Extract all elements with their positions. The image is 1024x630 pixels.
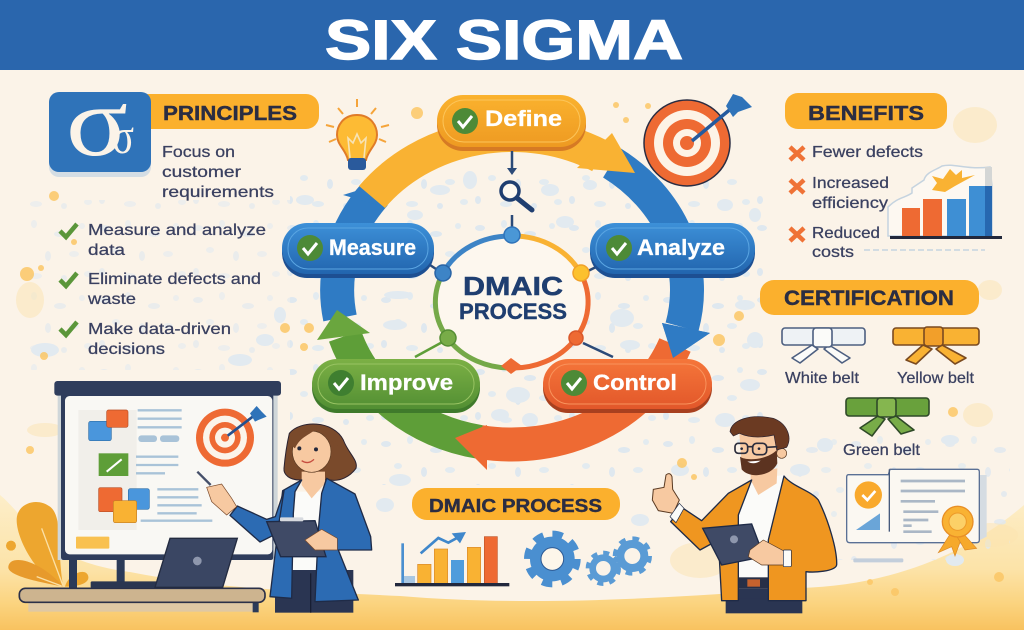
arc: improve arrow green <box>317 310 480 442</box>
background splatter <box>31 171 964 566</box>
center circle: DMAIC process: DMAIC <box>463 271 563 301</box>
analyze arrow head overlay <box>662 323 710 358</box>
hair <box>730 417 789 450</box>
panel: benefits <box>785 93 1002 261</box>
principles heading pill <box>130 94 319 129</box>
list: principle items: decisions <box>88 341 165 358</box>
list: principle items <box>60 222 266 358</box>
clipboard tablet <box>267 521 326 557</box>
chart: DMAIC cycle ring <box>282 95 755 470</box>
bottom heading pill: DMAIC PROCESS <box>429 496 602 516</box>
figure: woman presenter <box>197 424 372 613</box>
step pill: Define: Define <box>485 106 562 131</box>
pointing hand and pointer <box>197 472 211 485</box>
arc: define arrow yellow <box>372 133 635 197</box>
icon: sigma tile: σ <box>112 108 134 164</box>
illustration: presentation board and presenter <box>6 381 372 613</box>
list: benefits items: Increased <box>812 175 889 192</box>
list: benefits items: Reduced <box>812 225 880 242</box>
list: benefits items: Fewer defects <box>812 144 923 161</box>
icon: small gears <box>588 539 650 584</box>
icon: green belt <box>843 398 929 459</box>
icon: yellow belt <box>893 327 979 387</box>
chart: bars with trend arrow <box>395 532 509 586</box>
bottom heading pill <box>412 488 620 520</box>
presentation board <box>54 381 281 590</box>
background yellow dots <box>20 102 1004 596</box>
list: principle items: Make data-driven <box>88 321 231 338</box>
glasses <box>735 443 777 455</box>
white shirt <box>292 492 322 570</box>
blazer right <box>768 476 837 601</box>
beard <box>740 450 777 475</box>
icon: orange plant <box>6 502 88 587</box>
step pill: Define <box>437 95 586 151</box>
list: benefits items: costs <box>812 244 854 261</box>
step pill: Control <box>543 359 712 413</box>
tablet <box>703 524 764 565</box>
pants <box>726 597 802 613</box>
hand on tablet <box>748 540 783 565</box>
step pill: Measure <box>282 223 434 278</box>
icon: target and arrow <box>644 94 752 186</box>
step pill: Analyze <box>590 223 755 278</box>
text: focus on customer requirements: customer <box>162 164 242 181</box>
icon: sigma tile: σ <box>66 66 128 177</box>
benefits heading pill: BENEFITS <box>808 103 924 125</box>
panel: certification <box>760 280 987 562</box>
background fine splatter <box>30 175 1010 560</box>
hair back <box>284 424 356 480</box>
neck <box>302 472 325 498</box>
neck <box>751 468 777 495</box>
center circle: DMAIC process: PROCESS <box>459 299 567 324</box>
icon: white belt: White belt <box>785 370 860 387</box>
icon: large gear <box>528 535 576 583</box>
thumbs up hand <box>652 474 679 513</box>
shirt <box>738 475 790 577</box>
panel: principles <box>49 66 319 358</box>
text: focus on customer requirements <box>162 144 274 201</box>
arc: analyze arrow blue <box>612 163 710 358</box>
text: focus on customer requirements: Focus on <box>162 144 235 161</box>
pointing arm <box>230 491 284 542</box>
icon: green belt: Green belt <box>843 442 921 459</box>
certification heading pill <box>760 280 979 315</box>
text: focus on customer requirements: requirements <box>162 184 274 201</box>
blazer left <box>671 480 752 601</box>
arc: control arrow orange <box>455 345 675 470</box>
step pill: Improve: Improve <box>360 370 453 395</box>
step pill: Control: Control <box>593 370 677 395</box>
list: benefits items <box>790 144 923 261</box>
icon: light bulb <box>326 99 389 170</box>
blazer left <box>270 480 302 598</box>
background sand wave <box>0 495 1024 630</box>
principles heading pill: PRINCIPLES <box>163 103 297 125</box>
face <box>292 431 331 472</box>
list: principle items: Eliminate defects and <box>88 271 261 288</box>
header band <box>0 0 1024 71</box>
icon: certificate with seal <box>847 469 987 562</box>
table and laptop <box>19 538 265 612</box>
icon: board target <box>196 406 267 467</box>
list: principle items: Measure and analyze <box>88 222 266 239</box>
connector lines <box>415 151 613 357</box>
icon: white belt <box>782 328 865 387</box>
background yellow washes <box>16 107 1018 578</box>
center circle: DMAIC process <box>435 227 589 374</box>
arc: measure arrow blue <box>337 182 385 318</box>
icon: magnifier <box>501 168 532 210</box>
list: benefits items: efficiency <box>812 195 888 212</box>
step pill: Measure: Measure <box>329 235 416 260</box>
panel: bottom DMAIC process <box>395 488 650 586</box>
blazer right <box>315 478 372 602</box>
icon: sigma tile <box>49 66 151 177</box>
certification heading pill: CERTIFICATION <box>784 287 954 310</box>
belt <box>738 577 768 589</box>
figure: bearded man with tablet <box>652 417 837 613</box>
benefits heading pill <box>785 93 947 129</box>
step pill: Improve <box>312 359 480 413</box>
chart: rising bars with star <box>864 165 1002 250</box>
title: SIX SIGMA <box>325 8 683 71</box>
icon: yellow belt: Yellow belt <box>897 370 975 387</box>
list: principle items: data <box>88 242 125 259</box>
hair fringe <box>291 428 338 448</box>
list: principle items: waste <box>87 291 136 308</box>
face <box>739 432 777 473</box>
front hand <box>305 529 337 550</box>
pants <box>275 570 353 613</box>
eyes and smile <box>297 446 301 450</box>
step pill: Analyze: Analyze <box>637 235 725 260</box>
